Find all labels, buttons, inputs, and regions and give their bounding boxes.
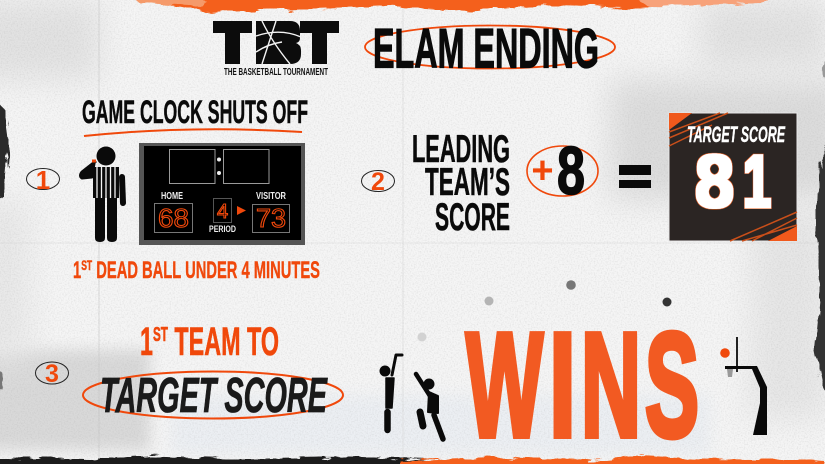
ball arc dots [418, 280, 730, 358]
period value [214, 198, 232, 223]
heading underline [84, 129, 302, 136]
WINS: I [549, 303, 576, 464]
target score card [669, 113, 797, 241]
icon: basketball hoop [725, 337, 767, 435]
step number 2 [362, 168, 394, 196]
text: 1st team to: ST [153, 324, 168, 346]
icon: shooting player [380, 355, 402, 430]
top orange brush stroke [130, 0, 770, 12]
caption: 1st dead ball under 4 minutes: 1 [73, 257, 86, 284]
step number 3 [36, 360, 68, 388]
WINS: S [645, 303, 699, 464]
logo subtitle: THE BASKETBALL TOURNAMENT [224, 67, 328, 78]
card number 81: 1 [743, 140, 771, 223]
title: Elam Ending [365, 16, 615, 80]
logo letter T right [300, 21, 339, 64]
step number 1: 1 [36, 165, 50, 195]
card corner stripes [669, 113, 692, 130]
period value: 4 [217, 201, 228, 223]
period label: PERIOD [209, 224, 236, 234]
visitor label: VISITOR [256, 191, 287, 202]
heading: game clock shuts off: GAME CLOCK SHUTS OFF [82, 94, 308, 130]
home score: 68 [158, 203, 189, 233]
bottom black brush stroke [0, 456, 460, 464]
title text: ELAM ENDING [373, 16, 599, 80]
logo letter B with basketball seams [256, 21, 301, 64]
scoreboard [139, 143, 305, 245]
card number 81 [695, 140, 771, 223]
bottom orange brush stroke [400, 456, 825, 464]
text: leading team's score: TEAM’S [425, 161, 510, 204]
text: 1st team to: TEAM TO [168, 320, 279, 364]
step number 3: 3 [45, 360, 59, 388]
icon: defending player [416, 374, 443, 439]
left grunge edge [0, 98, 9, 430]
WINS [466, 303, 699, 464]
plus eight circled [527, 133, 598, 209]
plus eight circled: + [531, 150, 554, 192]
possession arrow [237, 206, 246, 215]
target score with ellipse: TARGET SCORE [100, 369, 328, 423]
visitor score: 73 [256, 203, 286, 233]
step number 1 [26, 165, 60, 195]
logo letter T left [213, 21, 252, 64]
caption: 1st dead ball under 4 minutes: DEAD BALL UNDER 4 MINUTES [92, 257, 320, 284]
right grunge edge [815, 40, 825, 400]
text: leading team's score [412, 128, 510, 239]
step 2 panel [362, 113, 797, 241]
text: leading team's score: LEADING [412, 128, 510, 171]
card number 81: 8 [695, 140, 734, 223]
text: 1st team to: 1 [140, 320, 162, 364]
target score with ellipse [83, 369, 343, 423]
text: leading team's score: SCORE [435, 196, 510, 239]
step number 2: 2 [371, 168, 385, 196]
home label: HOME [161, 191, 183, 202]
clock windows [170, 150, 269, 184]
title ellipse [365, 26, 615, 68]
WINS: W [466, 303, 543, 464]
plus eight circled: 8 [557, 133, 585, 209]
equals sign [619, 165, 651, 188]
logo: TBT [213, 21, 339, 78]
WINS: N [581, 303, 641, 464]
caption: 1st dead ball under 4 minutes: ST [81, 257, 92, 273]
icon: referee blowing whistle [80, 146, 123, 242]
step 3 panel [36, 280, 767, 464]
step 1 panel [26, 94, 320, 284]
